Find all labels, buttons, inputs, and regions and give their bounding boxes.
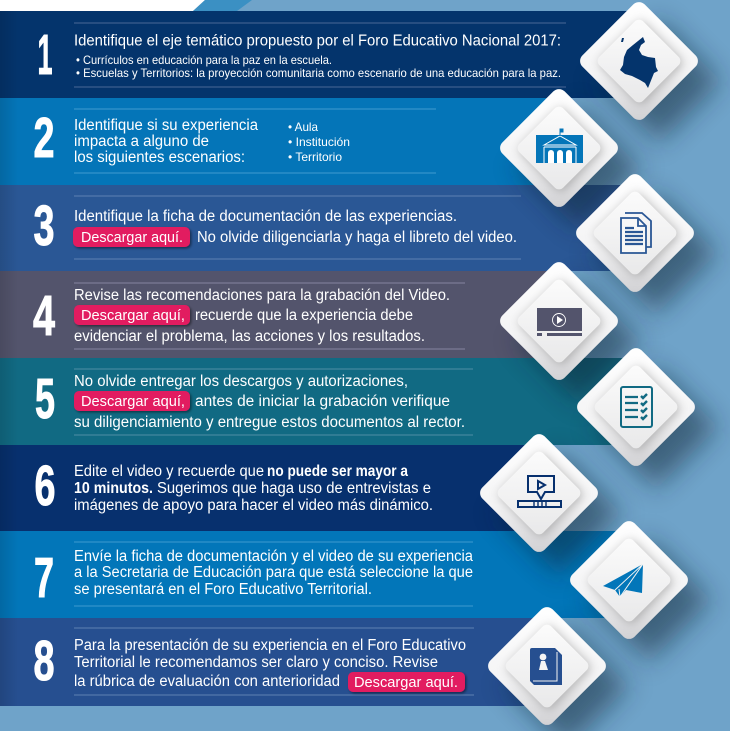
button 8: Descargar aquí. — [354, 674, 458, 691]
number 4: 4 — [33, 284, 55, 348]
icon: checklist — [621, 387, 652, 427]
band 6: 10 minutos. — [74, 480, 153, 497]
band 4: evidenciar el problema, las acciones y los resultados. — [74, 328, 425, 345]
icon: video player — [537, 308, 582, 336]
band 2 — [0, 98, 559, 185]
band 8 — [0, 618, 547, 706]
band 7: se presentará en el Foro Educativo Territorial. — [74, 581, 372, 598]
bullet 1a: • Currículos en educación para la paz en la escuela. — [76, 53, 332, 67]
band 7: a la Secretaria de Educación para que está seleccione la que — [74, 564, 473, 581]
band 6: imágenes de apoyo para hacer el video más dinámico. — [74, 497, 433, 514]
band 2: • Institución — [288, 135, 350, 149]
number 3: 3 — [34, 194, 54, 258]
band 1: 1 — [38, 23, 52, 87]
text 3: Identifique la ficha de documentación de las experiencias. — [74, 208, 457, 225]
diamond 1: Colombia map — [577, 0, 721, 143]
band 1 — [0, 11, 639, 98]
band 7 — [0, 531, 629, 618]
text 5: No olvide entregar los descargos y autorizaciones, — [74, 373, 408, 390]
diamond 5: checklist — [574, 345, 718, 489]
diamond 4: video — [497, 259, 641, 403]
band 6 — [0, 445, 539, 531]
diamond 8: book with person — [485, 604, 629, 731]
band 5 — [0, 358, 636, 445]
band 6: no puede ser mayor a — [267, 463, 408, 480]
text 8: Para la presentación de su experiencia en el Foro Educativo — [74, 637, 466, 654]
band 3: No olvide diligenciarla y haga el libreto del video. — [197, 229, 517, 246]
text 7: Envíe la ficha de documentación y el video de su experiencia — [74, 548, 473, 565]
button 4: Descargar aquí, — [81, 307, 185, 324]
diamond 3: documents — [573, 171, 717, 315]
bullet 1b: • Escuelas y Territorios: la proyección comunitaria como escenario de una educación para la paz. — [76, 66, 561, 80]
list 2: • Aula — [288, 120, 318, 134]
diamond 2: institution — [497, 86, 641, 230]
text 6: Edite el video y recuerde que — [74, 463, 264, 480]
button 5: Descargar aquí, — [81, 393, 185, 410]
band 2: los siguientes escenarios: — [74, 149, 245, 166]
band 5: antes de iniciar la grabación verifique — [195, 393, 450, 410]
band 8: Territorial le recomendamos ser claro y conciso. Revise — [74, 654, 438, 671]
icon: paper plane — [603, 564, 643, 597]
text 4: Revise las recomendaciones para la grabación del Video. — [74, 287, 450, 304]
band 6: Sugerimos que haga uso de entrevistas e — [157, 480, 431, 497]
number 5: 5 — [35, 367, 55, 431]
number 6: 6 — [34, 454, 56, 518]
number 2: 2 — [34, 106, 54, 170]
band 3 — [0, 185, 635, 271]
button 3: Descargar aquí. — [81, 229, 183, 246]
text 2: Identifique si su experiencia — [74, 117, 258, 134]
band 4: recuerde que la experiencia debe — [195, 307, 413, 324]
band 8: la rúbrica de evaluación con anterioridad — [74, 673, 340, 690]
icon: documents — [621, 213, 651, 253]
number 7: 7 — [34, 546, 54, 610]
number 8: 8 — [34, 629, 54, 693]
band 4 — [0, 271, 559, 358]
diamond 7: paper plane — [567, 518, 711, 662]
band 2: • Territorio — [288, 150, 342, 164]
icon: book — [530, 648, 562, 685]
band 2: impacta a alguno de — [74, 133, 209, 150]
band 5: su diligenciamiento y entregue estos documentos al rector. — [74, 414, 465, 431]
diamond 6: online video — [477, 431, 621, 575]
icon: Colombia map — [620, 37, 658, 88]
icon: building — [536, 129, 583, 163]
heading 1: Identifique el eje temático propuesto por el Foro Educativo Nacional 2017: — [74, 32, 561, 50]
icon: monitor with play — [518, 476, 561, 507]
